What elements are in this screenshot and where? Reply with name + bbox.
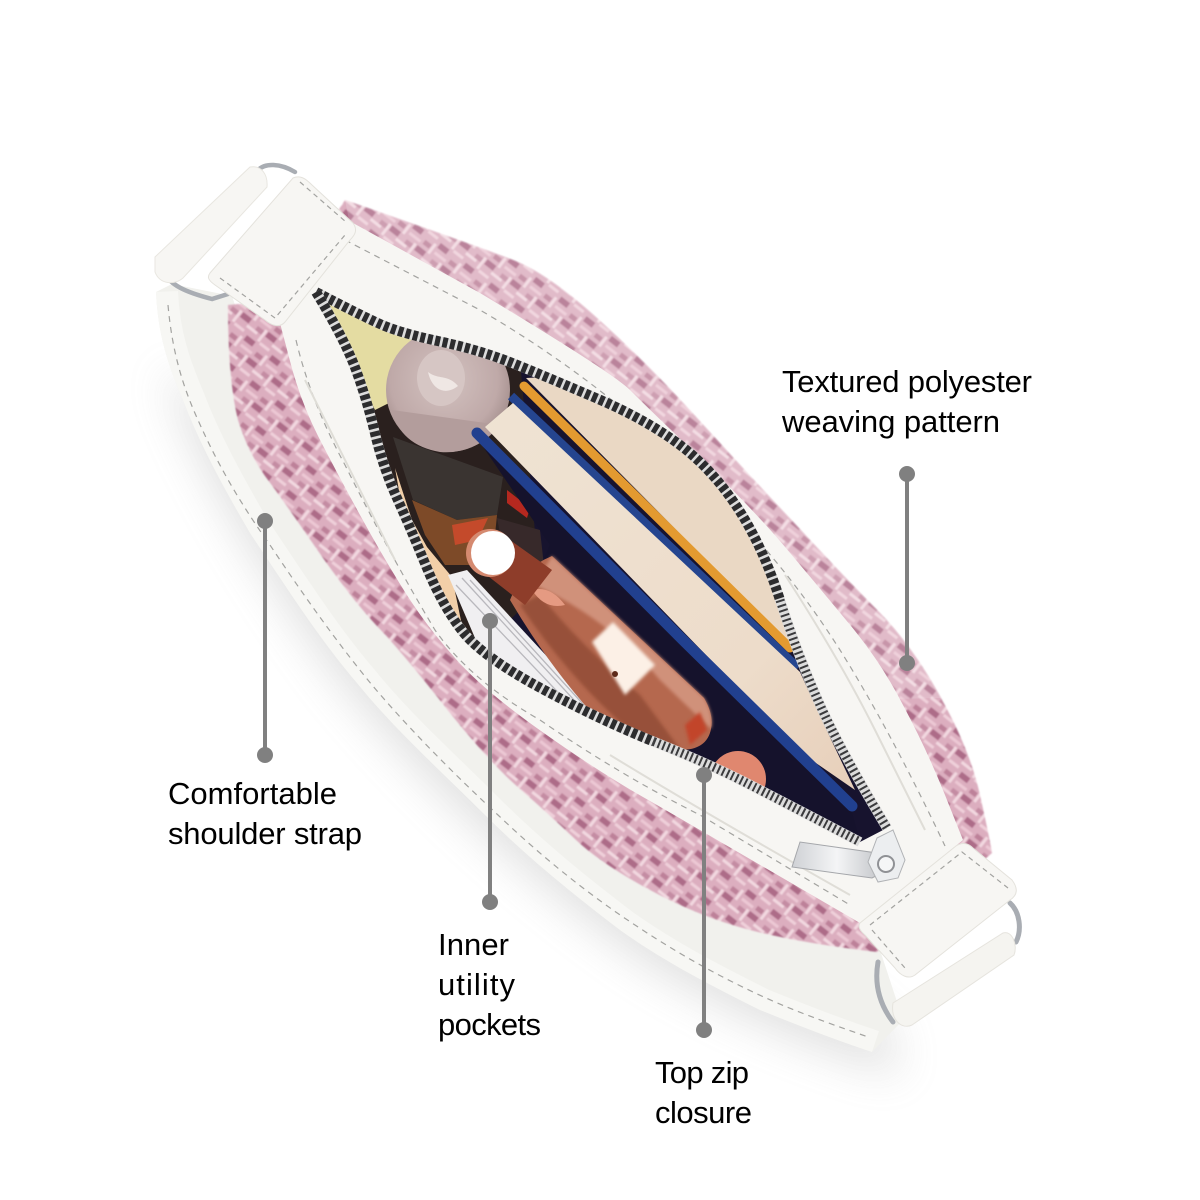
label text: Comfortable bbox=[168, 776, 337, 811]
small notebook bbox=[448, 570, 586, 706]
leader line bbox=[899, 466, 915, 671]
shoulder strap bbox=[156, 284, 903, 1052]
leader line bbox=[696, 767, 712, 1038]
bottom right metal ring bbox=[877, 903, 1019, 1022]
bag photo bbox=[155, 165, 1019, 1075]
peach lining strip bbox=[395, 468, 462, 622]
top left metal ring bbox=[164, 165, 295, 299]
white rim bbox=[280, 223, 963, 923]
pencil bbox=[524, 386, 790, 648]
makeup packet bbox=[393, 437, 545, 575]
book pages bbox=[485, 403, 855, 790]
leader line bbox=[482, 613, 498, 910]
label text: weaving pattern bbox=[781, 404, 1000, 439]
label text: utility bbox=[438, 967, 516, 1002]
bottom right strap tab bbox=[859, 844, 1016, 977]
top left strap tab bbox=[208, 177, 356, 326]
label text: Top zip bbox=[655, 1055, 749, 1090]
lighter upper band of weave bbox=[345, 200, 941, 700]
back notebook cover bbox=[511, 396, 798, 668]
callout: top zip bbox=[655, 767, 752, 1130]
blue spine bbox=[477, 433, 852, 806]
leader line bbox=[257, 513, 273, 763]
top left strap roll bbox=[155, 167, 267, 283]
dark left compartment bbox=[373, 366, 534, 637]
ball at bottom bbox=[716, 751, 766, 787]
label text: Textured polyester bbox=[782, 364, 1032, 399]
woven pink body bbox=[228, 200, 992, 952]
zipper pull bbox=[792, 830, 905, 882]
upper pages bbox=[526, 377, 797, 653]
callout: inner pockets bbox=[438, 613, 541, 1042]
label text: Inner bbox=[438, 927, 509, 962]
strap shadow bbox=[165, 370, 900, 1075]
label text: pockets bbox=[438, 1007, 541, 1042]
label text: shoulder strap bbox=[168, 816, 362, 851]
dark region beside compact bbox=[484, 448, 534, 522]
label text: closure bbox=[655, 1095, 752, 1130]
callout: textured polyester bbox=[781, 364, 1032, 671]
bag interior bbox=[330, 304, 887, 842]
yellow lining bbox=[329, 304, 412, 410]
callout: shoulder strap bbox=[168, 513, 362, 851]
bottom right strap roll bbox=[893, 933, 1015, 1026]
zipper bbox=[316, 292, 887, 842]
round bottle bbox=[386, 328, 510, 452]
copper compact bbox=[510, 556, 712, 750]
lipstick bbox=[466, 529, 552, 605]
